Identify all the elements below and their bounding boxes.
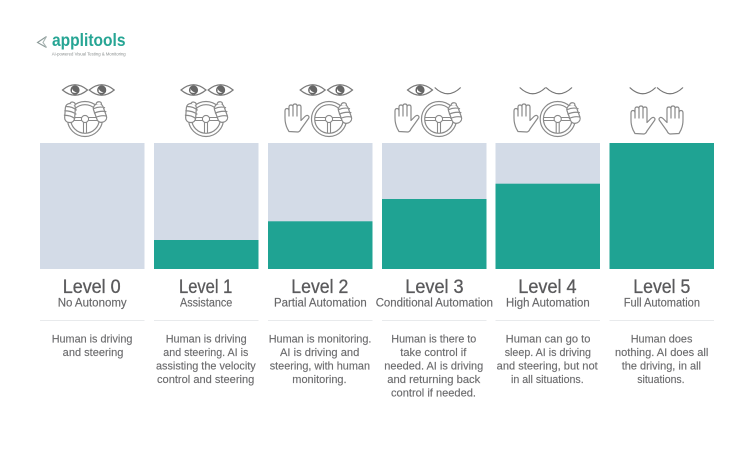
description: and steering xyxy=(63,347,123,359)
heading: Level 0 xyxy=(63,277,121,298)
heading: Level 5 xyxy=(633,277,690,298)
description: and returning back xyxy=(387,374,481,386)
description xyxy=(269,333,371,386)
heading: Level 1 xyxy=(179,277,232,298)
bar: level 0 xyxy=(40,143,144,269)
panel: level 4 xyxy=(496,88,600,386)
bar: level 3 xyxy=(382,143,486,269)
bar: level 2 xyxy=(268,143,372,269)
subtitle: Partial Automation xyxy=(274,298,367,310)
panel: level 2 xyxy=(268,85,372,386)
description xyxy=(384,333,483,400)
description: Human does xyxy=(631,333,693,345)
icon: logo bird xyxy=(38,36,46,48)
logo xyxy=(38,30,126,56)
description: control if needed. xyxy=(391,388,476,400)
description xyxy=(52,333,132,359)
panel: level 3 xyxy=(376,85,493,400)
description: control and steering xyxy=(157,374,254,386)
heading: Level 2 xyxy=(291,277,348,298)
description: monitoring. xyxy=(292,374,347,386)
icon: eyes and both hands on wheel xyxy=(181,85,233,136)
subtitle: High Automation xyxy=(506,298,590,310)
description xyxy=(497,333,598,386)
panel: level 0 xyxy=(40,85,144,359)
description: Human is driving xyxy=(166,333,247,345)
description: Human can go to xyxy=(506,333,590,345)
description: AI is driving and xyxy=(280,347,359,359)
panel: level 1 xyxy=(154,85,258,386)
icon: eyes closed, open hand, one hand on wheel xyxy=(514,88,582,136)
description: needed. AI is driving xyxy=(384,361,483,373)
description: situations. xyxy=(637,374,685,386)
icon: eyes and both hands on wheel xyxy=(62,85,114,136)
icon: one eye open, open hand, one hand on wheel xyxy=(395,85,463,136)
description: and steering. AI is xyxy=(163,347,249,359)
subtitle: Assistance xyxy=(180,298,232,310)
logo wordmark: applitools xyxy=(52,30,126,50)
subtitle: Conditional Automation xyxy=(376,298,493,310)
subtitle: No Autonomy xyxy=(58,298,127,310)
description: take control if xyxy=(400,347,467,359)
description: nothing. AI does all xyxy=(615,347,708,359)
description: Human is there to xyxy=(391,333,476,345)
description: in all situations. xyxy=(511,374,584,386)
description xyxy=(156,333,256,386)
description: and steering, but not xyxy=(497,361,598,373)
logo tagline: AI-powered Visual Testing & Monitoring xyxy=(52,52,126,56)
description: assisting the velocity xyxy=(156,361,256,373)
icon: eyes closed, both hands open xyxy=(630,88,683,134)
bar: level 5 xyxy=(610,143,714,269)
description xyxy=(615,333,708,386)
bar: level 1 xyxy=(154,143,258,269)
subtitle: Full Automation xyxy=(624,298,700,310)
description: sleep. AI is driving xyxy=(505,347,591,359)
description: steering, with human xyxy=(270,361,370,373)
description: the driving, in all xyxy=(622,361,701,373)
heading: Level 3 xyxy=(405,277,464,298)
icon: eyes, open hand, one hand on wheel xyxy=(285,85,353,136)
heading: Level 4 xyxy=(518,277,577,298)
description: Human is driving xyxy=(52,333,132,345)
panel: level 5 xyxy=(610,88,714,386)
bar: level 4 xyxy=(496,143,600,269)
description: Human is monitoring. xyxy=(269,333,371,345)
